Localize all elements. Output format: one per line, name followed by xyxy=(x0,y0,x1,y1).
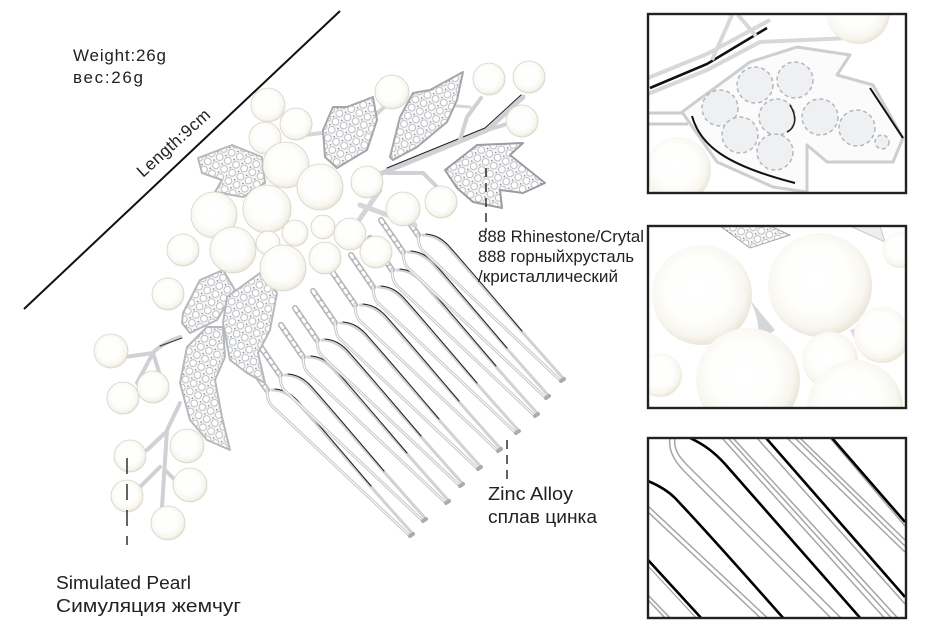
label: zinc alloy: Zinc Alloy xyxy=(488,484,573,504)
comb teeth xyxy=(245,203,564,536)
pearls xyxy=(94,61,545,540)
leader line: zinc alloy xyxy=(506,440,508,480)
label: zinc alloy xyxy=(488,484,598,527)
leaf: upper right xyxy=(445,143,545,208)
label: rhinestone: 888 горныйхрусталь xyxy=(478,247,634,266)
label: simulated pearl: Симуляция жемчуг xyxy=(56,596,242,616)
panel: comb teeth detail xyxy=(648,438,906,626)
panel: rhinestone leaf detail xyxy=(646,12,908,194)
panel: pearl detail xyxy=(646,224,908,410)
label: rhinestone: 888 Rhinestone/Crytal xyxy=(478,227,644,246)
leader line: rhinestone xyxy=(485,168,487,232)
leader line: pearl xyxy=(126,458,128,545)
leaf: upper middle xyxy=(323,97,377,168)
label: simulated pearl xyxy=(56,573,242,616)
label: zinc alloy: сплав цинка xyxy=(488,507,598,527)
leaf: lower left xyxy=(182,270,235,333)
weight text xyxy=(73,46,166,87)
label: rhinestone xyxy=(478,227,644,286)
label: simulated pearl: Simulated Pearl xyxy=(56,573,191,593)
upper branches xyxy=(305,95,523,240)
weight text: Weight:26g xyxy=(73,46,166,65)
leaf: upper left xyxy=(198,145,265,197)
leaf: upper centre xyxy=(390,72,463,160)
lower branches xyxy=(125,337,182,507)
label: rhinestone: /кристаллический xyxy=(478,267,618,286)
weight text: вес:26g xyxy=(73,68,143,87)
length measurement line xyxy=(24,11,340,309)
leaf: lower long xyxy=(180,327,230,450)
leaf: lower right xyxy=(223,273,277,383)
length label: Length:9cm xyxy=(133,105,214,181)
